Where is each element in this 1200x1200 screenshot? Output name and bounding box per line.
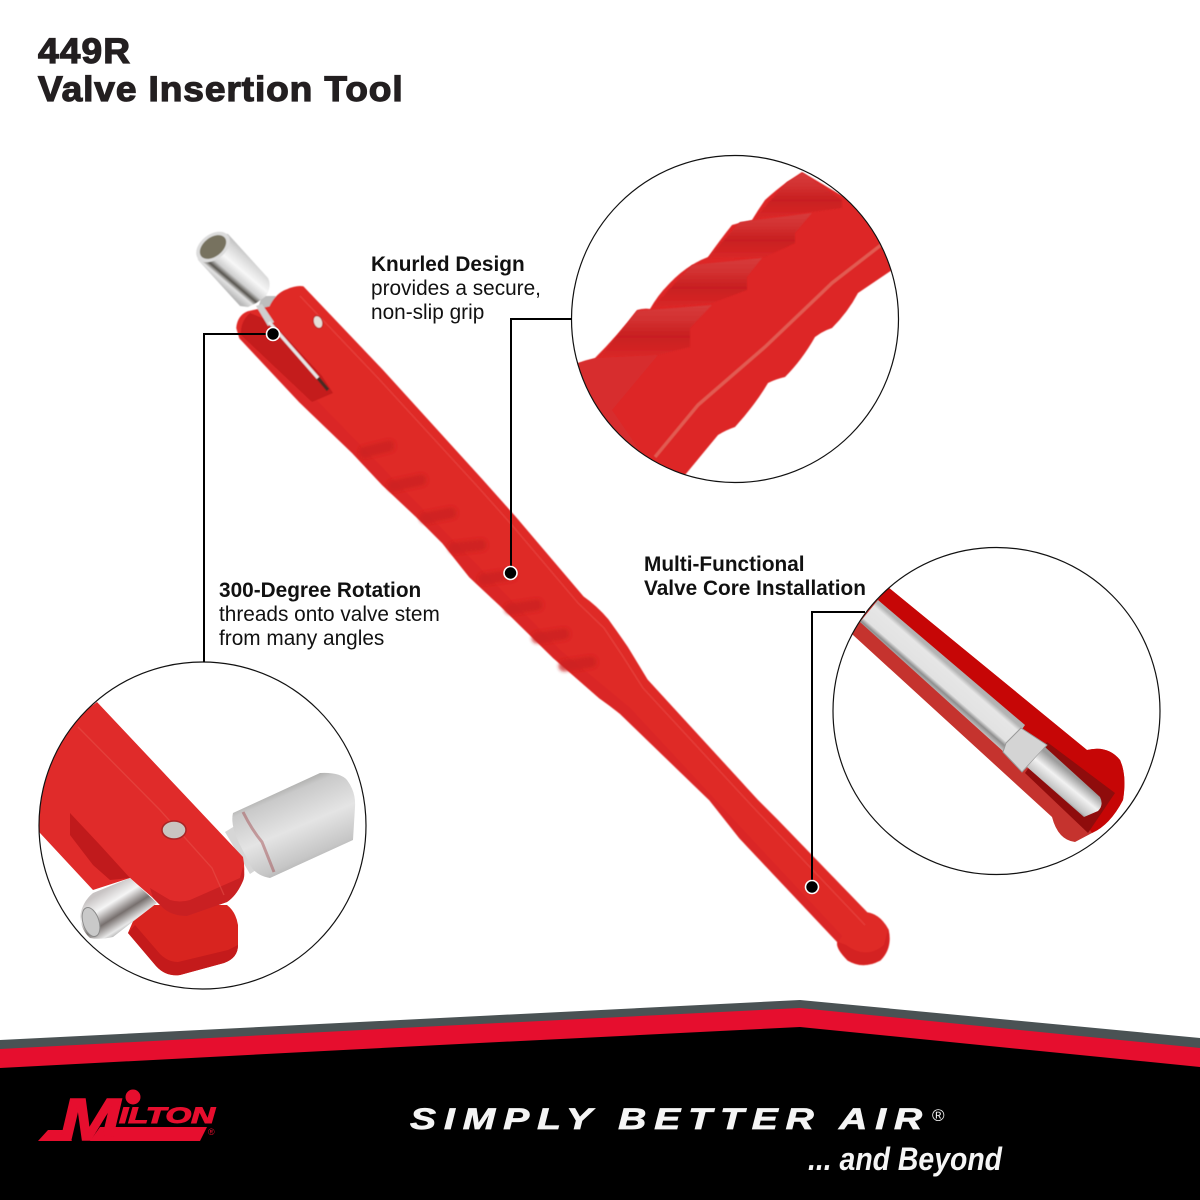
joint lower tab [128,905,238,975]
callout: knurled design: Knurled Design [371,253,525,276]
joint tab front face [128,925,238,975]
tool upper ridge highlight [300,296,865,925]
tool slot with pin [241,304,333,402]
circle detail: valve core installation [830,548,1160,874]
tool lower edge shading [240,332,842,942]
joint red body [40,702,244,905]
joint body lower shade [150,867,244,916]
joint rivet [162,821,186,839]
core tip pin [1027,747,1102,817]
core upper bright strip [878,587,1124,833]
callout: 300-degree rotation: threads onto valve stem [219,603,440,626]
main product: valve insertion tool [190,225,889,965]
core collar [1003,728,1047,772]
logo: Milton: ® [208,1127,215,1137]
joint chrome socket [225,773,355,878]
core chrome tube [860,600,1025,753]
tool head shading [838,930,889,964]
callout: knurled design: non-slip grip [371,301,484,324]
callout: 300-degree rotation: from many angles [219,627,384,650]
joint chrome pin [80,878,157,939]
callout: knurled design: provides a secure, [371,277,541,300]
tool chrome socket [190,225,276,308]
tagline [410,1103,1003,1177]
grip light seam [655,238,890,457]
tagline: SIMPLY BETTER AIR [410,1103,922,1136]
footer band [0,1000,1200,1200]
joint crease line [78,727,224,895]
core red body [852,588,1124,842]
leader: multi-functional [806,612,865,894]
tagline: ® [932,1106,945,1125]
callout: multi-functional: Valve Core Installation [644,577,866,600]
leader: knurled [504,319,572,580]
joint slot [70,813,130,880]
grip lower-left facet [578,356,657,364]
title [38,31,403,109]
tool knurled grooves [365,446,591,666]
callout: 300-degree rotation: 300-Degree Rotation [219,579,421,602]
grip knurl ridges [600,173,842,357]
tagline: ... and Beyond [808,1141,1003,1177]
callout: multi-functional: Multi-Functional [644,553,805,576]
leader: rotation [204,328,280,662]
title: Valve Insertion Tool [38,69,403,109]
circle detail: rotation joint [20,662,366,989]
grip red body [560,172,900,480]
tool pivot rivet [312,314,324,330]
core dark well [1025,742,1115,833]
circle detail: knurled grip [560,156,900,482]
logo: Milton [38,1087,217,1153]
logo: Milton: M [60,1087,122,1153]
title: 449R [38,31,130,71]
tool red body [237,287,889,964]
logo: Milton: ILTON [119,1103,217,1128]
